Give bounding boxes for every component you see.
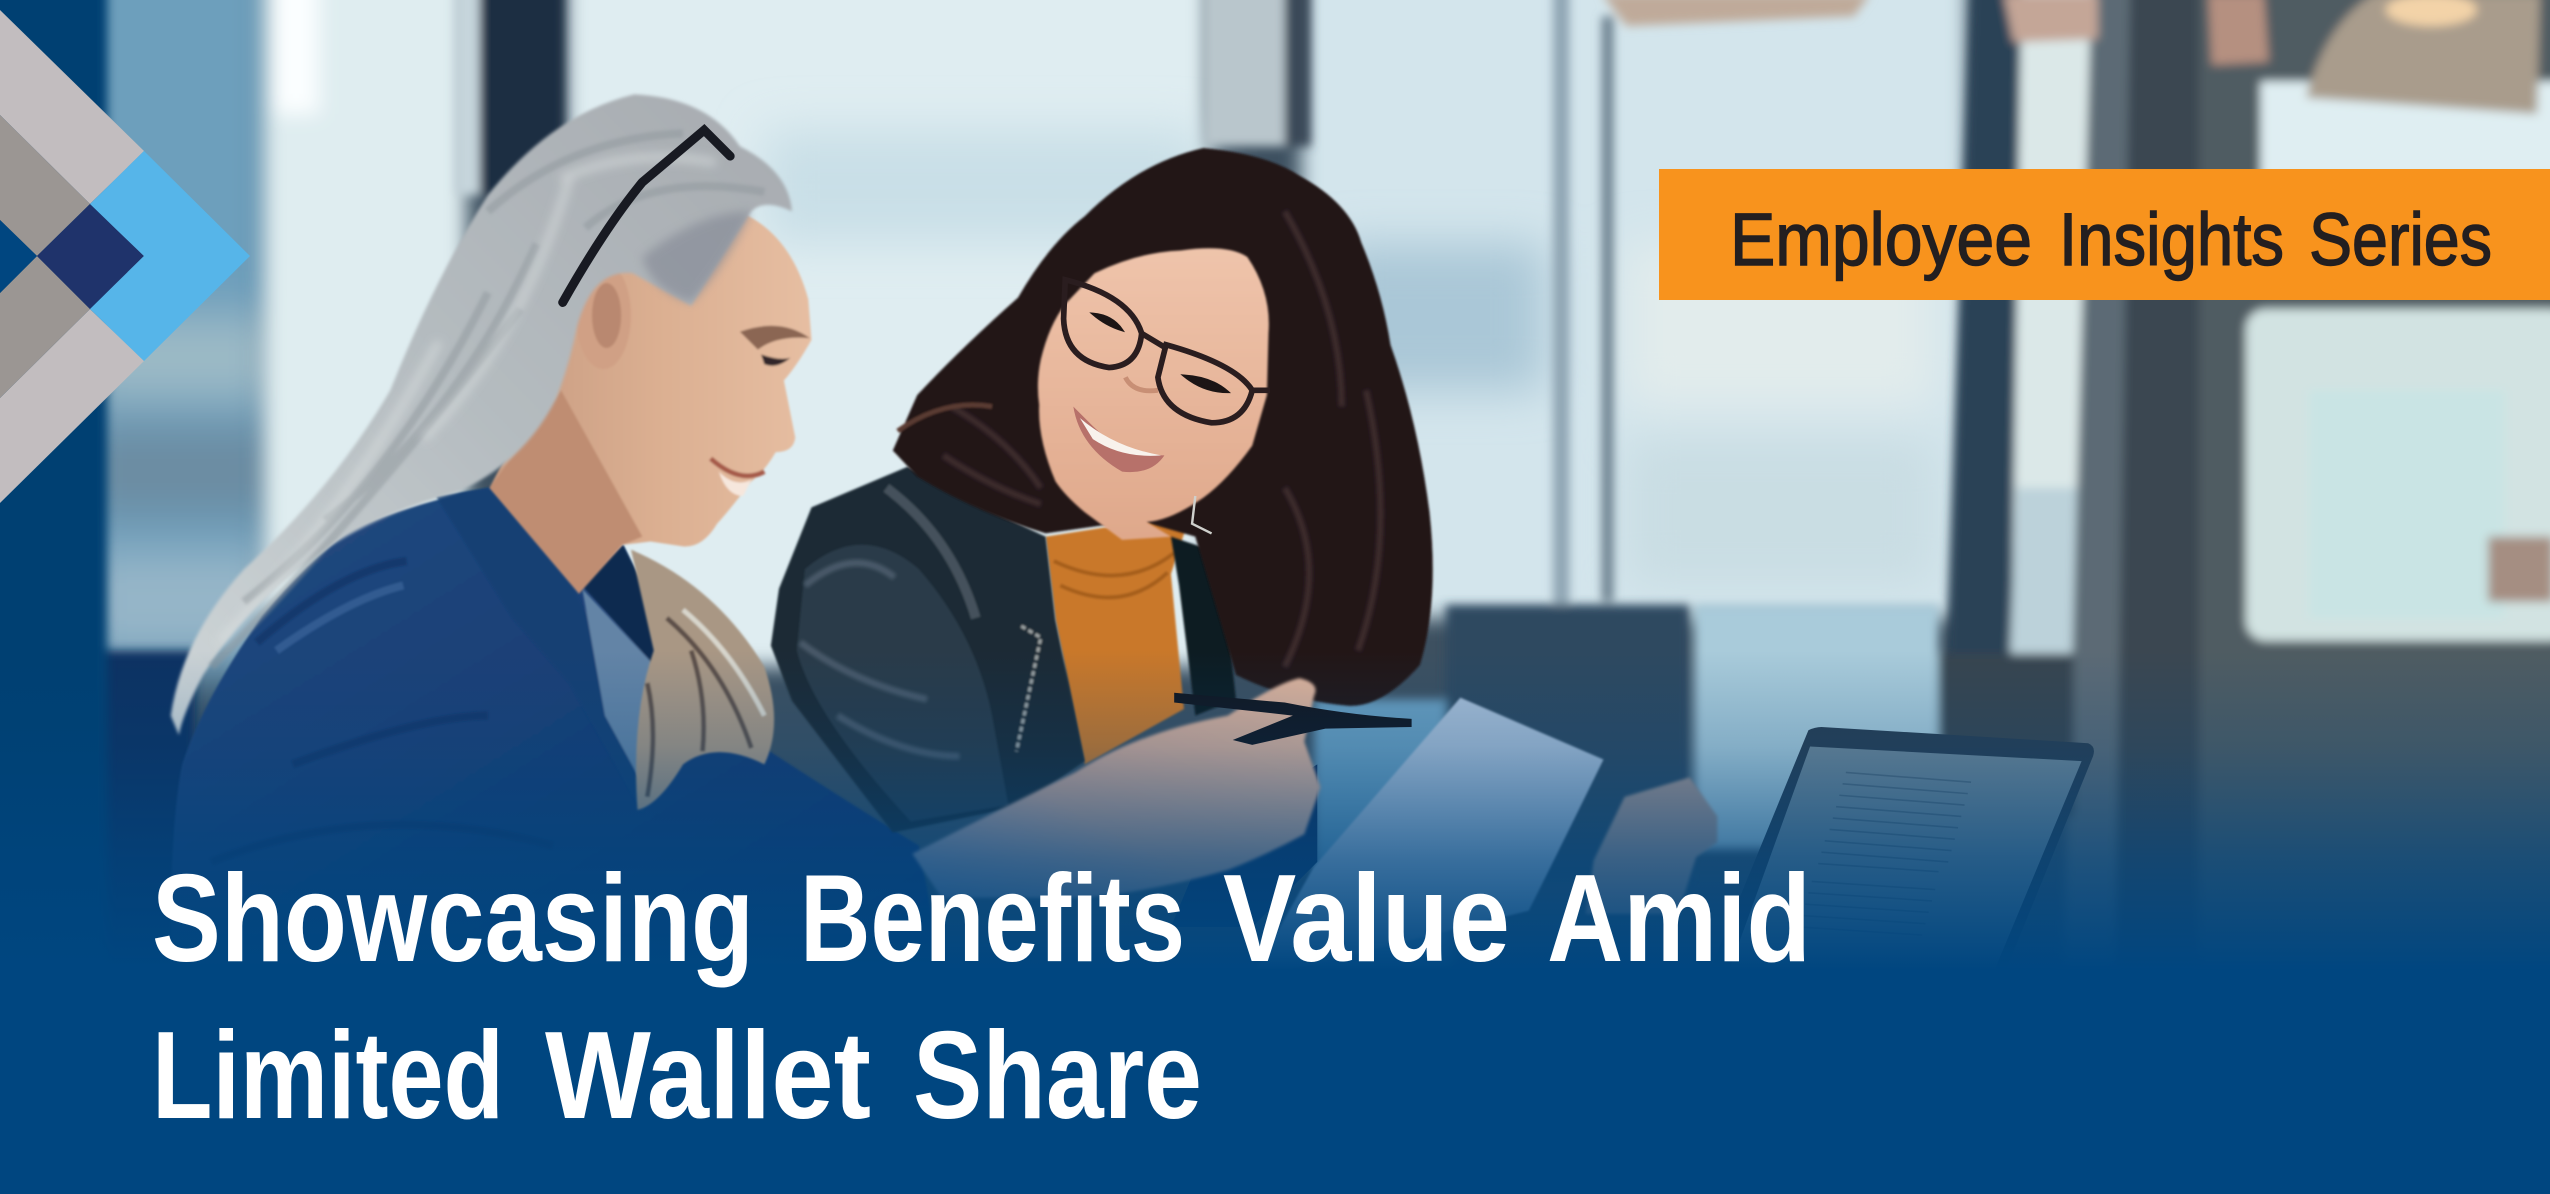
series banner [1659, 169, 2550, 300]
pen [1174, 693, 1412, 745]
document and pen hand [912, 678, 1717, 976]
title: Share [913, 1007, 1202, 1145]
smile [1073, 377, 1164, 472]
light blue chevron [90, 151, 250, 361]
jacket cuff [1171, 764, 1317, 927]
woman with silver hair [171, 94, 943, 976]
small blue triangle [0, 220, 37, 293]
corner diamond logo mark [0, 10, 250, 503]
turtleneck [1046, 514, 1190, 764]
navy diamond [37, 204, 144, 309]
series label: Series [2309, 198, 2492, 281]
title: Benefits [800, 850, 1185, 988]
woman with dark hair [771, 148, 1433, 833]
series label: Insights [2059, 198, 2284, 281]
series label: Employee [1730, 198, 2032, 281]
upper dark grey band [0, 115, 90, 256]
title: Value [1223, 850, 1510, 988]
face [1038, 248, 1269, 540]
neck and face [490, 208, 812, 594]
lower dark grey band [0, 256, 90, 398]
dark hair [893, 148, 1433, 706]
collar and shirt [211, 488, 670, 862]
title: Amid [1547, 850, 1811, 988]
jacket [171, 488, 943, 976]
title: Showcasing [152, 850, 754, 988]
glasses on head [563, 130, 730, 302]
gradient fade into navy [0, 651, 2550, 971]
glasses [1064, 280, 1270, 423]
laptop [1708, 727, 2094, 976]
leather jacket [771, 467, 1236, 833]
title [152, 850, 1811, 1145]
eyes [1093, 314, 1228, 392]
left navy column [0, 0, 107, 1194]
earring [1192, 496, 1212, 533]
lower light grey band [0, 309, 144, 503]
title: Limited [152, 1007, 504, 1145]
pointing hand [912, 678, 1321, 898]
ponytail [631, 550, 774, 810]
title: Wallet [545, 1007, 871, 1145]
sheet of paper [1252, 698, 1604, 976]
silver hair [171, 94, 792, 735]
resting hand [1586, 777, 1717, 914]
navy footer band [0, 969, 2550, 1194]
upper light grey band [0, 10, 144, 204]
